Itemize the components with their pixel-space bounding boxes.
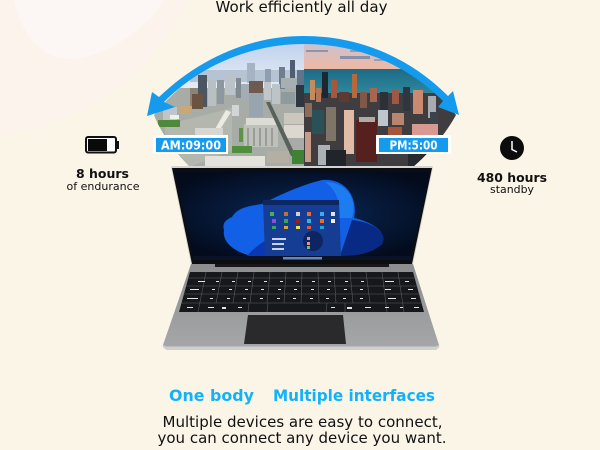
label: PM time xyxy=(376,135,451,154)
icon: battery xyxy=(86,137,119,152)
wallpaper bloom xyxy=(223,180,383,256)
taskbar icons xyxy=(283,257,322,260)
morning city xyxy=(150,38,304,170)
start menu panel xyxy=(263,200,341,256)
description text: you can connect any device you want. xyxy=(158,429,447,447)
decorative pale blob, top left xyxy=(0,0,187,136)
stat: 480 hours standby: 480 hours xyxy=(477,170,547,185)
laptop screen xyxy=(171,166,433,264)
stat: 480 hours standby xyxy=(477,170,547,196)
day-night arc arrow xyxy=(147,36,459,116)
touchpad xyxy=(244,315,346,344)
label: PM time: PM:5:00 xyxy=(390,138,438,152)
icon: clock xyxy=(500,136,524,160)
stat: 8 hours of endurance: of endurance xyxy=(66,180,140,193)
description text: Multiple devices are easy to connect, xyxy=(162,413,442,431)
stat: 8 hours of endurance xyxy=(66,166,140,193)
description text xyxy=(158,413,447,447)
stat: 480 hours standby: standby xyxy=(490,183,534,196)
heading: One body Multiple interfaces xyxy=(169,386,435,405)
keyboard xyxy=(179,272,424,312)
laptop xyxy=(163,166,439,350)
city day/night photo dome xyxy=(150,38,459,170)
stat: 8 hours of endurance: 8 hours xyxy=(76,166,129,181)
label: AM time xyxy=(153,135,228,154)
label: AM time: AM:09:00 xyxy=(161,138,221,152)
laptop base xyxy=(163,263,439,350)
heading: One body Multiple interfaces: One body xyxy=(169,386,255,405)
evening city xyxy=(304,38,459,170)
heading: One body Multiple interfaces: Multiple interfaces xyxy=(273,386,435,405)
